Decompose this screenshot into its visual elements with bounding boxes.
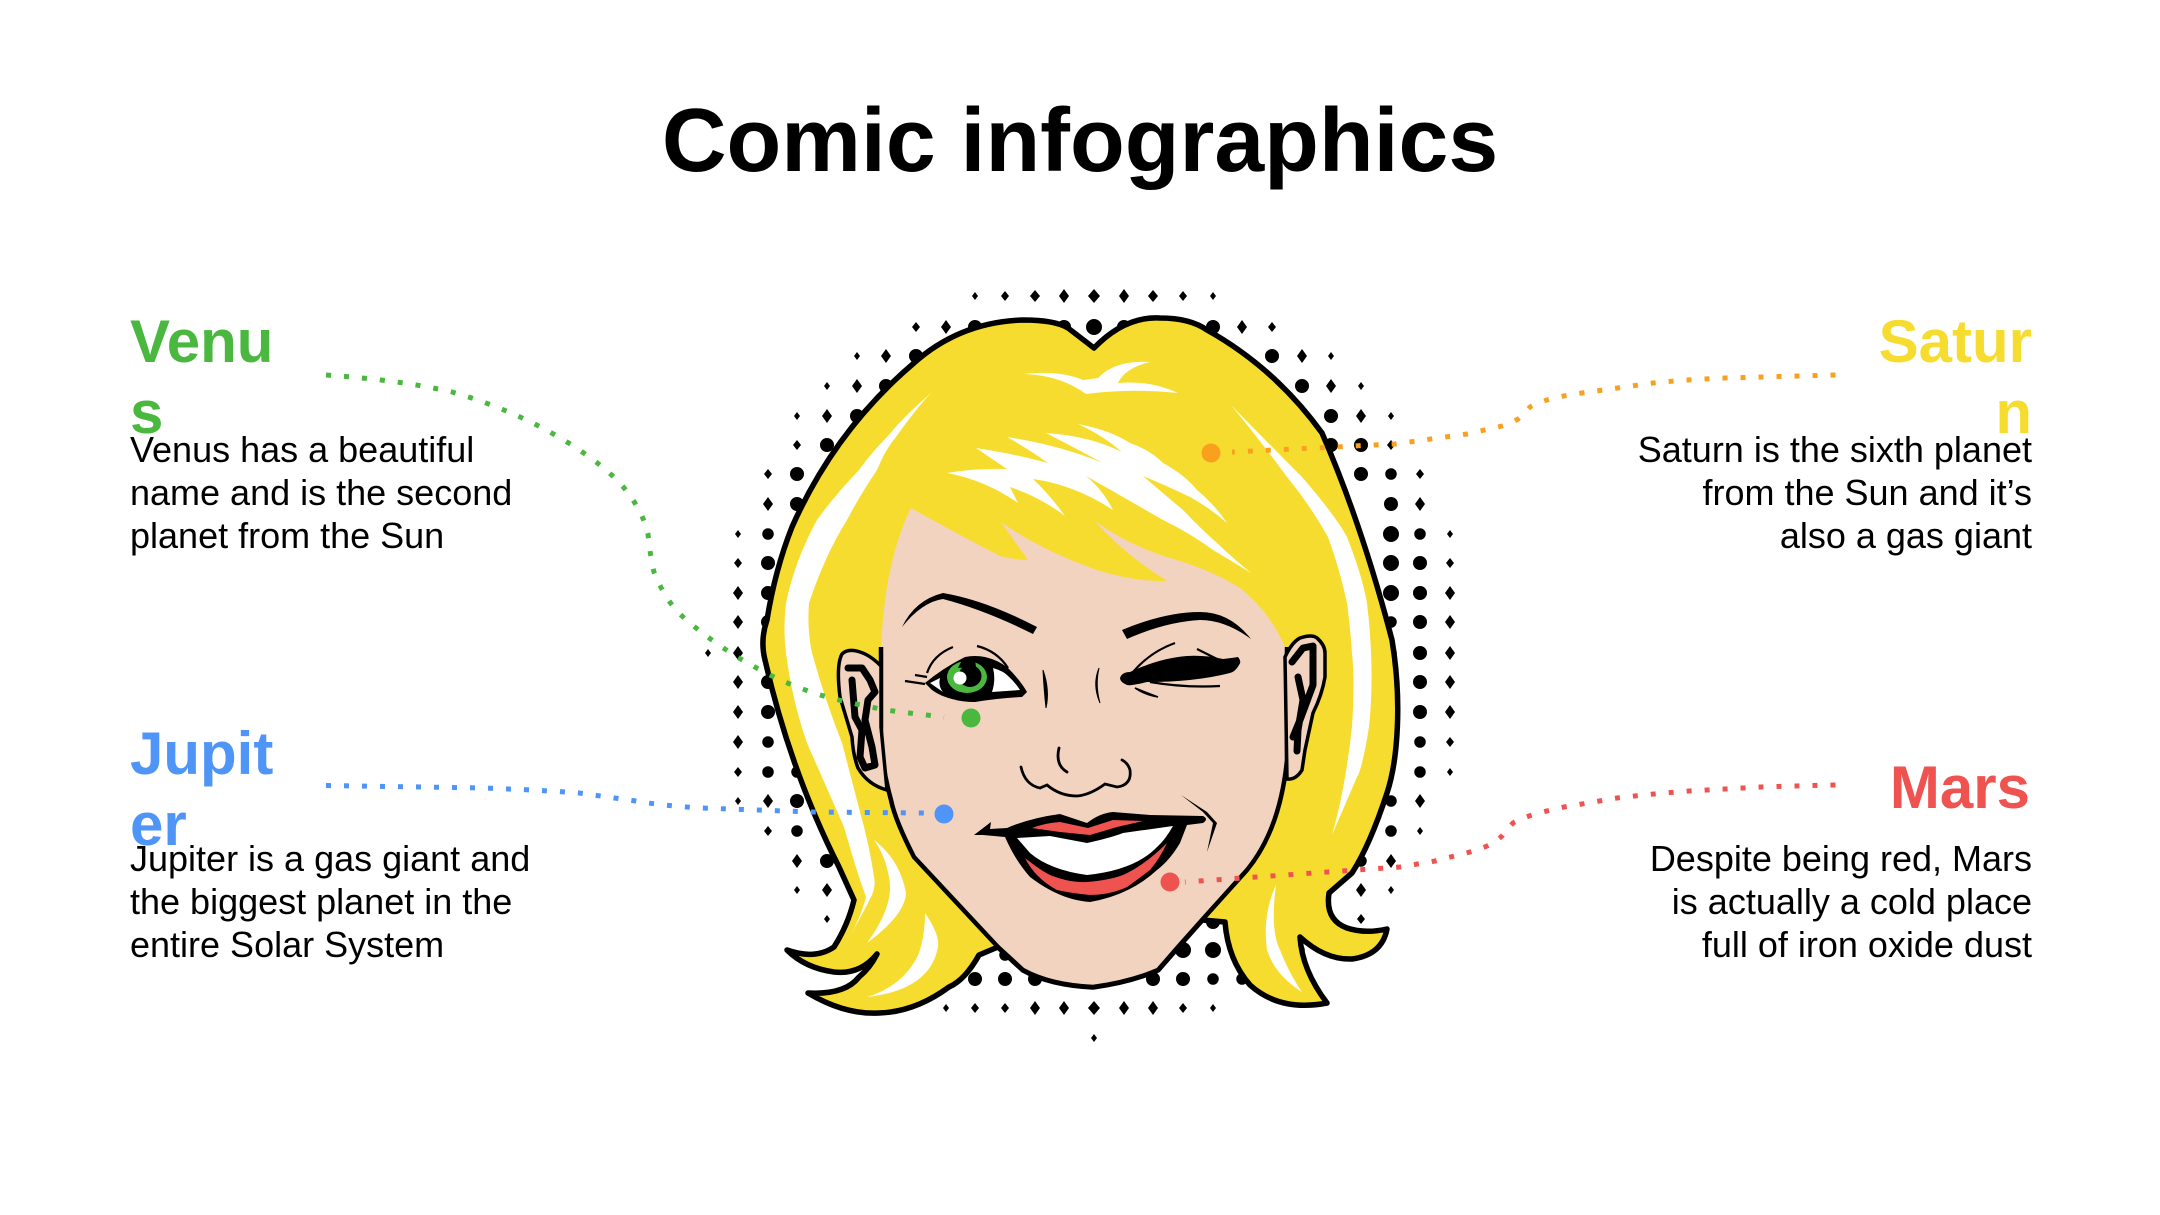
heading: Venus: Venus [130, 308, 273, 446]
text: Venus: name and is the second [130, 472, 512, 513]
title: Comic infographics [662, 90, 1498, 190]
line: Saturn [1202, 375, 1836, 462]
face jaw outline [881, 647, 1287, 987]
hair highlight: crown tuft [1023, 353, 1178, 394]
open green eye [905, 646, 1027, 702]
hair highlight: lower right strand [1266, 885, 1302, 992]
right ear [1285, 636, 1325, 779]
hair base shape [763, 318, 1398, 1013]
text: Jupiter: entire Solar System [130, 924, 444, 965]
heading: Mars: Mars [1890, 754, 2030, 821]
text: Jupiter: the biggest planet in the [130, 881, 512, 922]
text: Mars [1650, 838, 2032, 965]
text: Jupiter [130, 838, 530, 965]
left ear [838, 650, 887, 790]
text: Venus [130, 428, 512, 556]
hair highlight: lower left strands [867, 840, 938, 997]
right eyebrow [1122, 612, 1251, 639]
hair highlight: fringe [947, 424, 1251, 573]
nose [1021, 748, 1130, 796]
heading: Saturn: Saturn [1879, 308, 2032, 446]
text: Venus: Venus has a beautiful [130, 428, 474, 470]
left eyebrow [902, 593, 1037, 634]
text: Mars: full of iron oxide dust [1702, 924, 2032, 965]
text: Saturn: also a gas giant [1780, 515, 2032, 556]
text: Saturn [1638, 428, 2032, 556]
hair [763, 318, 1398, 1013]
text: Mars: Despite being red, Mars [1650, 838, 2032, 878]
heading: Jupiter: Jupiter [130, 720, 273, 858]
line: Mars [1160, 785, 1836, 892]
mouth [974, 812, 1206, 902]
text: Saturn: Saturn is the sixth planet [1638, 428, 2032, 470]
text: Saturn: from the Sun and it’s [1702, 472, 2032, 513]
face skin [881, 508, 1287, 987]
text: Venus: planet from the Sun [130, 515, 444, 556]
text: Mars: is actually a cold place [1672, 881, 2032, 922]
hair highlight: right strand [1231, 405, 1372, 835]
line: Jupiter [326, 786, 954, 824]
line: Venus [326, 375, 980, 728]
smile crease [1181, 795, 1217, 852]
nose bridge lines [1043, 668, 1100, 708]
hair highlight: left strand [784, 393, 931, 947]
winking eye [1120, 643, 1240, 697]
halftone dot background [705, 289, 1455, 1042]
text: Jupiter: Jupiter is a gas giant and [130, 838, 530, 878]
